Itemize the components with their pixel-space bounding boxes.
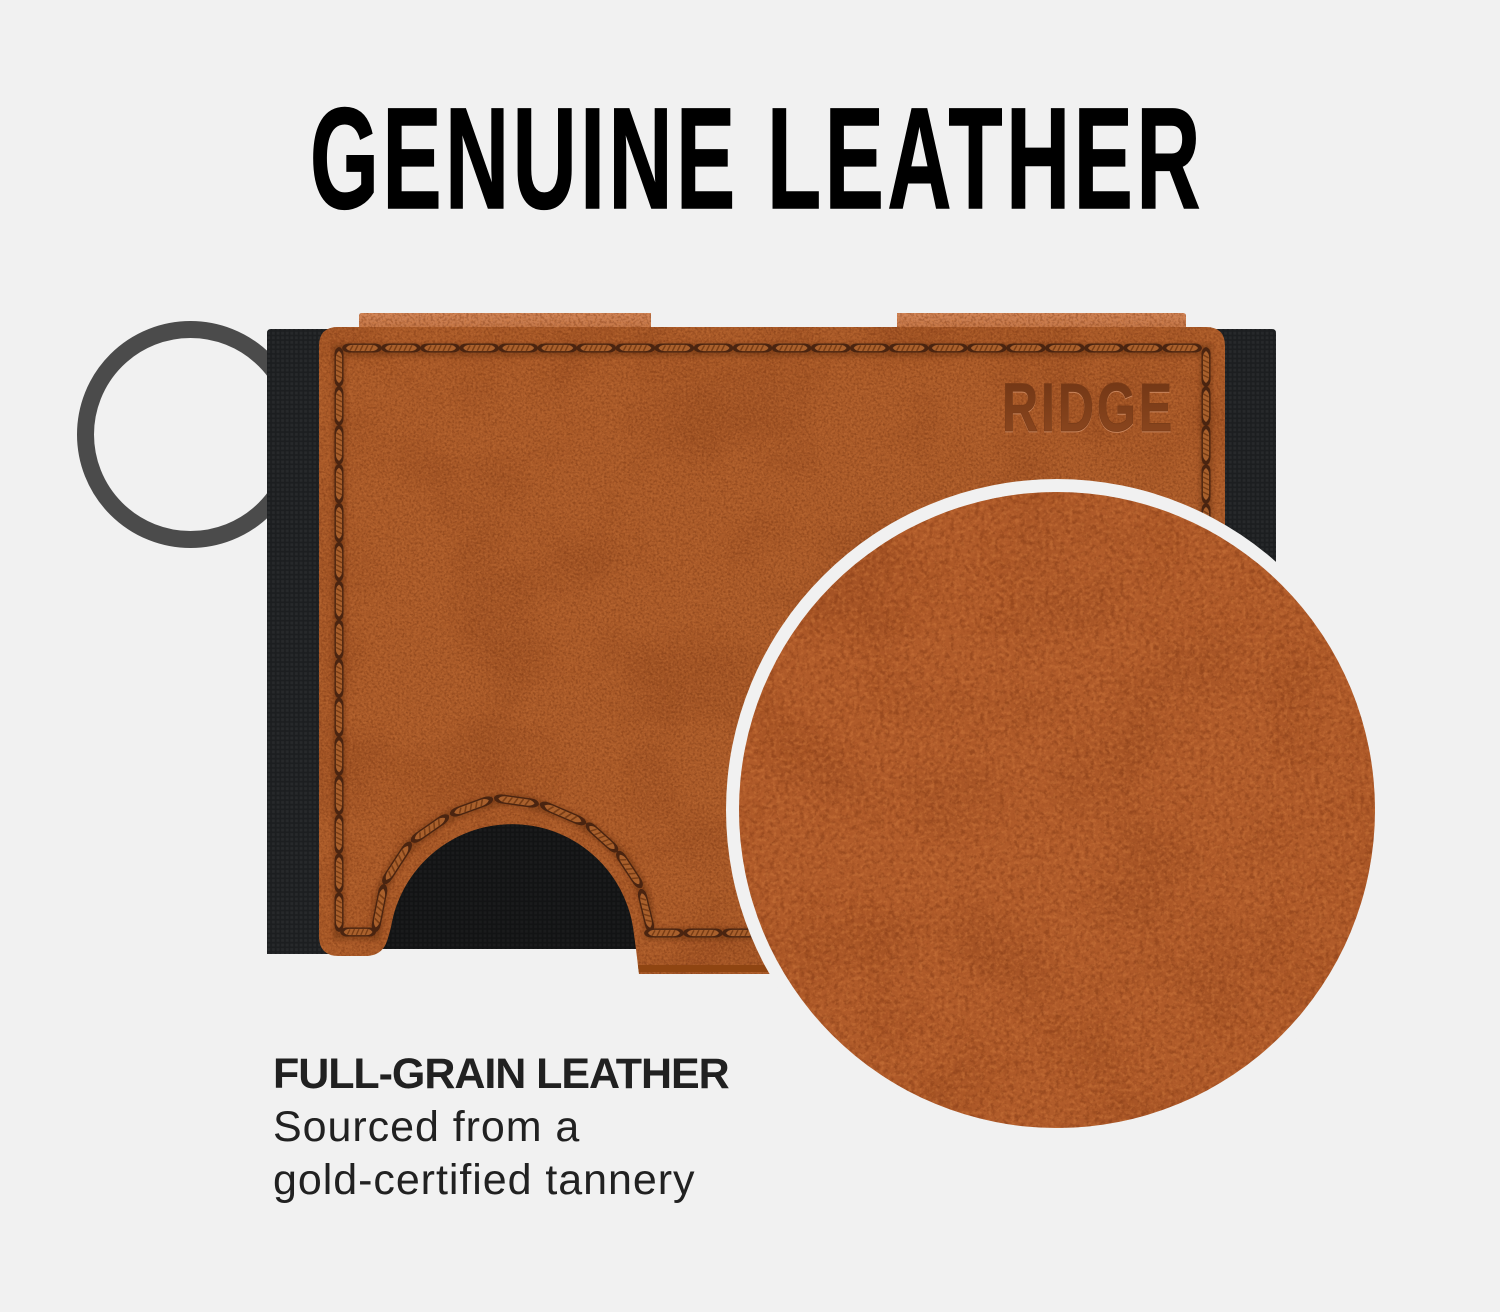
black elastic band bbox=[267, 329, 1276, 954]
logo: RIDGE bbox=[1002, 369, 1175, 446]
caption: gold-certified tannery bbox=[273, 1156, 695, 1204]
magnified leather circle bbox=[726, 479, 1388, 1141]
top leather tabs bbox=[359, 313, 1186, 327]
caption: FULL-GRAIN LEATHER bbox=[273, 1050, 729, 1098]
caption: Sourced from a bbox=[273, 1103, 580, 1151]
wallet illustration bbox=[77, 106, 1375, 1128]
caption bbox=[273, 1050, 729, 1204]
stitching bbox=[334, 344, 1210, 938]
leather card holder bbox=[315, 325, 1230, 977]
icon: key ring bbox=[86, 330, 296, 540]
leather surface bbox=[315, 325, 1230, 977]
